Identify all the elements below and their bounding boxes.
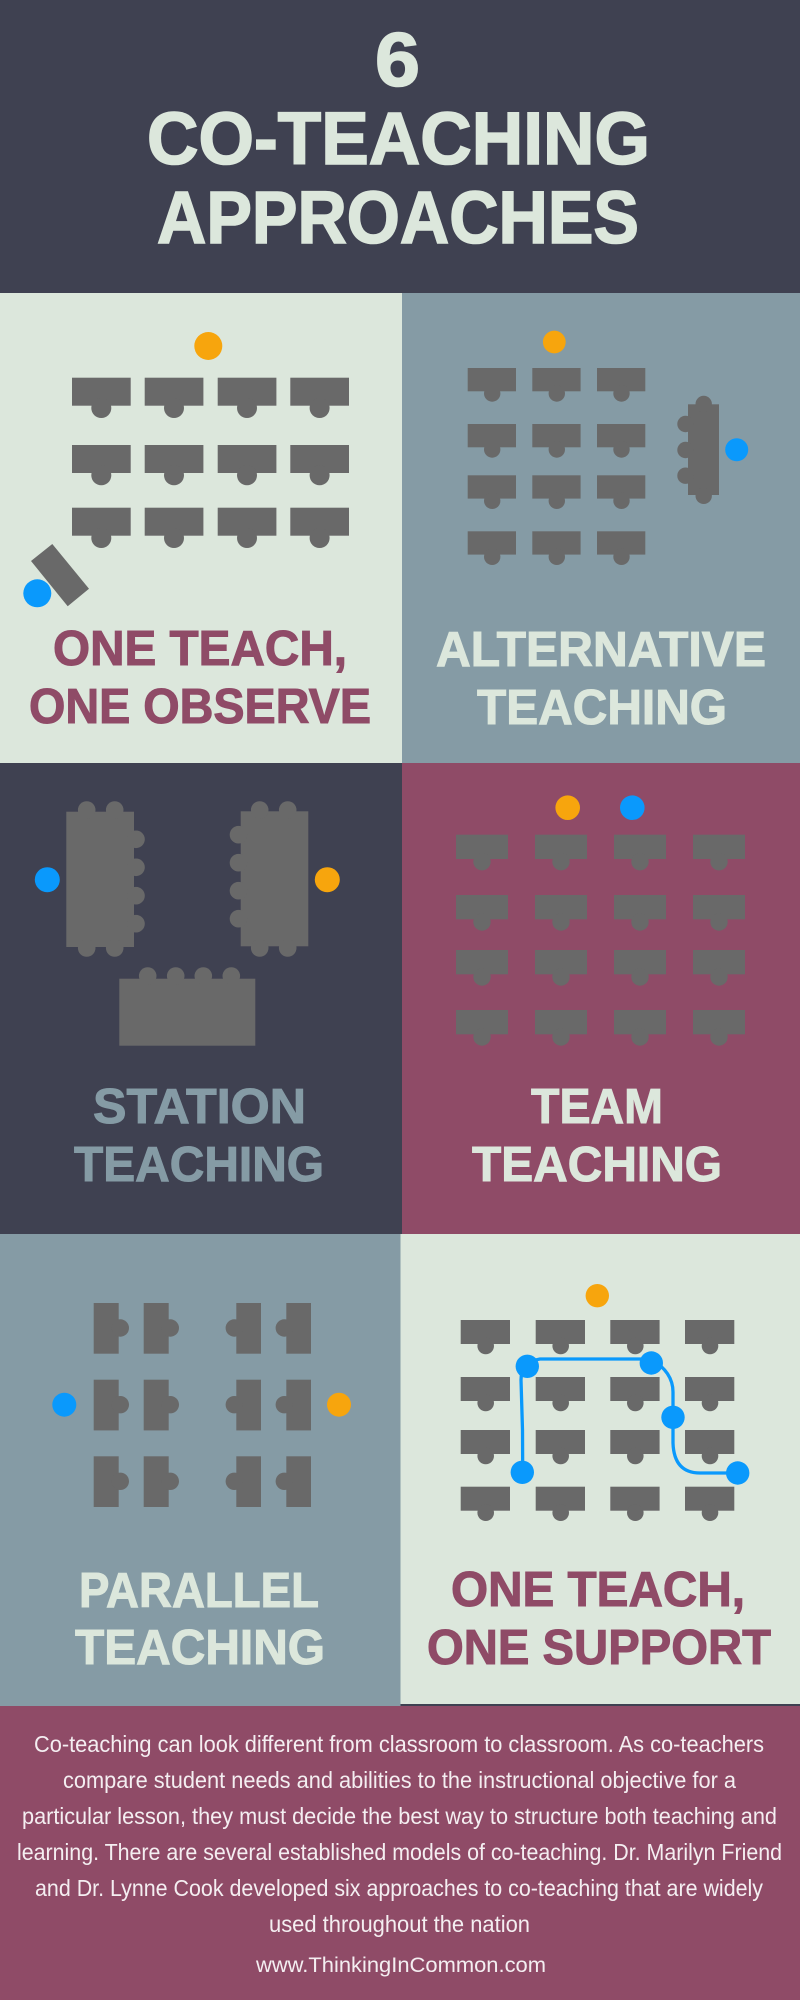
left desk group: [94, 1303, 179, 1507]
heading: station teaching: STATION: [93, 1080, 306, 1134]
icon: teacher orange: [543, 331, 566, 353]
icon: teacher blue: [52, 1393, 76, 1417]
student desks: [468, 368, 645, 565]
student desks: [461, 1320, 734, 1521]
panel: team teaching: [402, 763, 800, 1234]
panel: one teach, one support: [400, 1234, 800, 1704]
student desks: [72, 378, 349, 548]
icon: teacher blue: [620, 795, 645, 820]
icon: bottom station table: [119, 967, 255, 1046]
right desk group: [226, 1303, 311, 1507]
icon: support teacher stops: [511, 1351, 749, 1485]
heading: alternative teaching: [436, 623, 766, 735]
heading: alternative teaching: TEACHING: [477, 681, 727, 735]
heading: parallel teaching: TEACHING: [75, 1621, 325, 1675]
heading: station teaching: [74, 1080, 324, 1192]
heading: one teach, one support: ONE TEACH,: [451, 1563, 745, 1617]
heading: one teach, one observe: [29, 622, 371, 734]
description text: Co-teaching can look different from classroom to classroom. As co-teachers: [34, 1731, 764, 1757]
panel: station teaching: [0, 763, 402, 1234]
heading: alternative teaching: ALTERNATIVE: [436, 623, 766, 677]
heading: parallel teaching: PARALLEL: [79, 1564, 319, 1618]
icon: teacher orange: [327, 1393, 351, 1417]
description text: compare student needs and abilities to the instructional objective for a: [63, 1767, 736, 1793]
icon: right station table: [230, 801, 308, 957]
icon: teacher orange: [586, 1284, 609, 1307]
panel: parallel teaching: [0, 1234, 400, 1706]
footer panel: [0, 1706, 800, 2000]
title: [147, 18, 650, 259]
heading: one teach, one support: [427, 1563, 771, 1675]
heading: parallel teaching: [75, 1564, 325, 1675]
website url: www.ThinkingInCommon.com: [255, 1954, 546, 1977]
icon: teacher orange: [555, 795, 580, 820]
icon: left station table: [66, 801, 145, 957]
description text: and Dr. Lynne Cook developed six approaches to co-teaching that are widely: [35, 1875, 763, 1901]
heading: team teaching: TEACHING: [472, 1138, 722, 1192]
icon: observer desk: [31, 544, 89, 606]
title: APPROACHES: [157, 176, 639, 259]
header panel: [0, 0, 800, 293]
description text: used throughout the nation: [269, 1911, 530, 1937]
arrow: support teacher path: [521, 1359, 737, 1473]
student desks: [456, 835, 745, 1046]
heading: one teach, one observe: ONE OBSERVE: [29, 680, 371, 734]
title: CO-TEACHING: [147, 97, 650, 180]
icon: teacher orange: [315, 867, 340, 892]
icon: side table: [677, 396, 719, 504]
icon: teacher blue: [35, 867, 60, 892]
heading: team teaching: [472, 1080, 722, 1192]
title: 6: [375, 18, 420, 103]
panel: one teach, one observe: [0, 293, 402, 763]
icon: teacher blue: [725, 438, 748, 461]
panel: alternative teaching: [402, 293, 800, 763]
heading: team teaching: TEAM: [531, 1080, 663, 1134]
description text: particular lesson, they must decide the best way to structure both teaching and: [22, 1803, 777, 1829]
description text: [17, 1731, 782, 1937]
icon: observer blue: [23, 579, 51, 607]
heading: one teach, one observe: ONE TEACH,: [53, 622, 347, 676]
heading: one teach, one support: ONE SUPPORT: [427, 1621, 771, 1675]
icon: teacher orange: [194, 332, 222, 360]
heading: station teaching: TEACHING: [74, 1138, 324, 1192]
